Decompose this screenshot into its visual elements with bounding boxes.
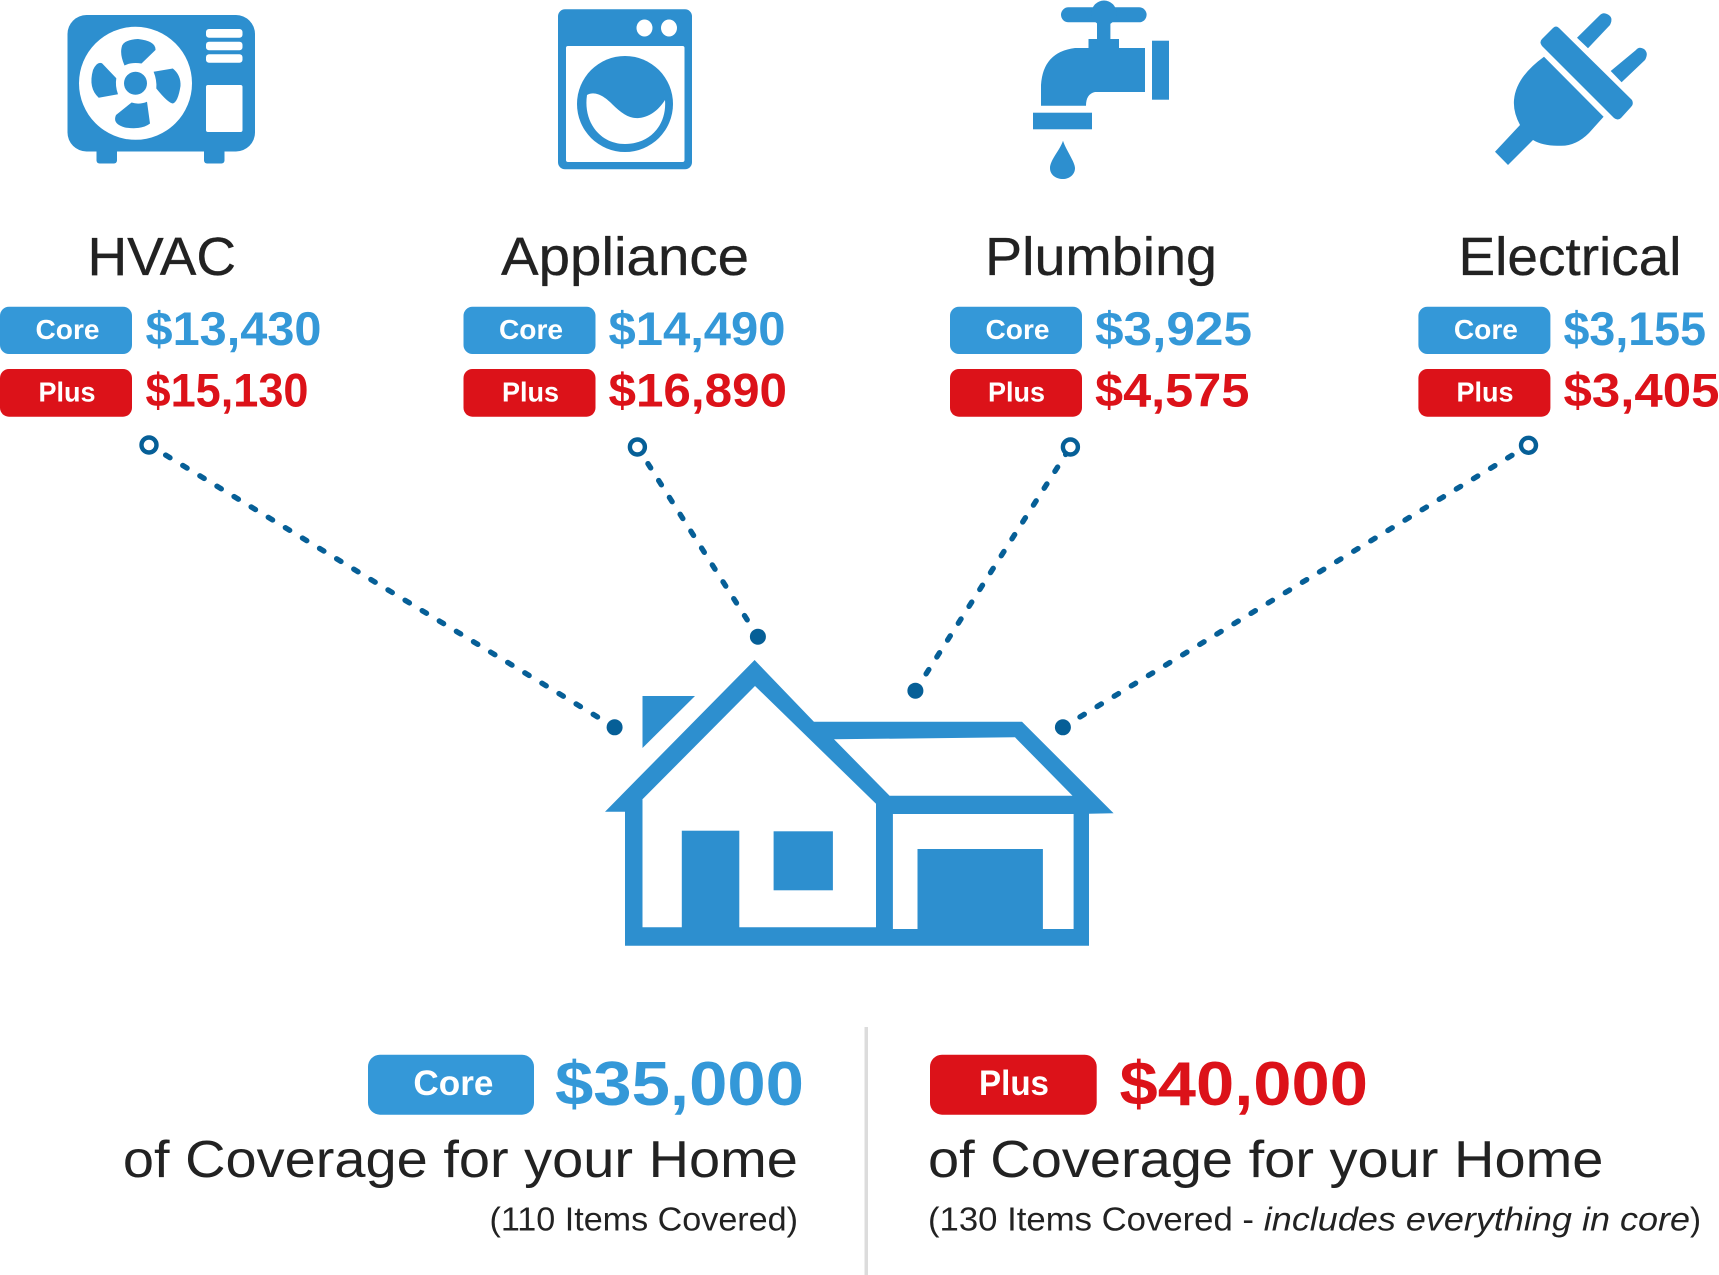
panel: plus coverage: (130 Items Covered -: [928, 1201, 1254, 1238]
prices: Appliance: [464, 302, 787, 417]
prices: Plumbing: $3,925: [1095, 302, 1252, 355]
icon: electrical plug: [1495, 13, 1647, 165]
panel: core coverage: [123, 1050, 804, 1238]
prices: HVAC: $15,130: [146, 364, 308, 417]
heading: Electrical: Electrical: [1458, 227, 1682, 287]
heading: HVAC: HVAC: [88, 227, 236, 287]
prices: Appliance: $14,490: [608, 302, 786, 355]
panel: plus coverage: $40,000: [1120, 1050, 1368, 1119]
prices: Electrical: $3,405: [1564, 364, 1719, 417]
prices: HVAC: $13,430: [146, 302, 322, 355]
prices: HVAC: Core: [36, 314, 100, 345]
panel: plus coverage: ): [1690, 1201, 1701, 1238]
icon: house: [605, 660, 1114, 946]
panel: plus coverage: includes everything in core: [1264, 1201, 1690, 1238]
panel: plus coverage: Plus: [979, 1064, 1049, 1103]
prices: Electrical: Core: [1454, 314, 1518, 345]
prices: Appliance: Core: [499, 314, 563, 345]
icon: HVAC unit: [68, 15, 255, 164]
connector: HVAC to house: [142, 438, 623, 735]
panel: plus coverage: of Coverage for your Home: [928, 1131, 1603, 1189]
prices: Plumbing: Core: [986, 314, 1050, 345]
prices: Electrical: Plus: [1456, 376, 1514, 407]
panel: plus coverage: [928, 1050, 1701, 1238]
prices: Appliance: $16,890: [608, 364, 787, 417]
connector: Electrical to house: [1055, 438, 1536, 735]
prices: Electrical: $3,155: [1564, 302, 1706, 355]
panel: core coverage: of Coverage for your Home: [123, 1131, 798, 1189]
prices: Plumbing: Plus: [988, 376, 1045, 407]
icon: dripping faucet: [1033, 0, 1169, 179]
prices: Plumbing: [950, 302, 1252, 417]
divider: [864, 1027, 868, 1275]
panel: core coverage: $35,000: [555, 1050, 804, 1119]
prices: HVAC: [0, 302, 322, 417]
prices: HVAC: Plus: [38, 376, 96, 407]
prices: Appliance: Plus: [502, 376, 559, 407]
icon: washing machine: [558, 9, 692, 169]
heading: Appliance: Appliance: [501, 227, 749, 287]
connector: Plumbing to house: [907, 440, 1078, 699]
prices: Plumbing: $4,575: [1095, 364, 1249, 417]
panel: core coverage: (110 Items Covered): [490, 1201, 798, 1238]
prices: Electrical: [1418, 302, 1719, 417]
connector: Appliance to house: [630, 440, 766, 645]
panel: core coverage: Core: [413, 1064, 493, 1103]
heading: Plumbing: Plumbing: [985, 227, 1217, 287]
